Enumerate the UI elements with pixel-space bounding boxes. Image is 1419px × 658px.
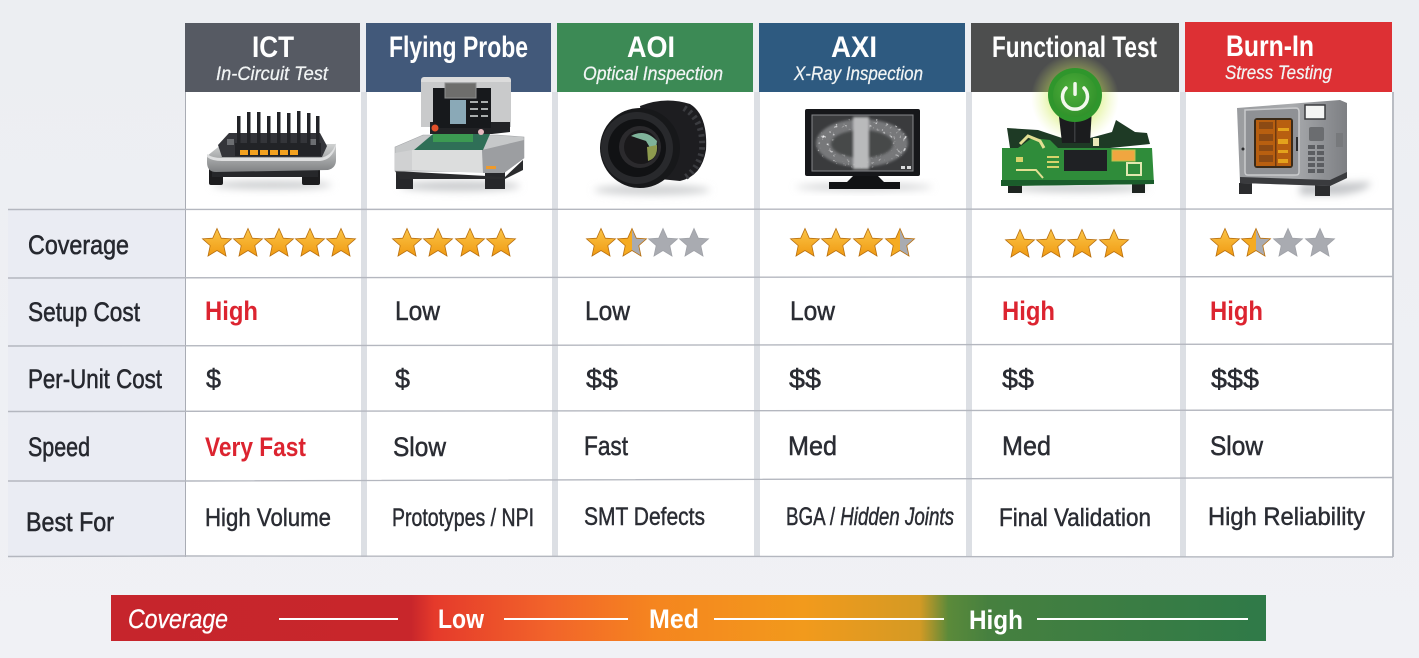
header: AOI xyxy=(557,23,753,92)
header: AXI: AXI xyxy=(831,31,877,64)
row: per-unit cost values: $ xyxy=(395,364,410,394)
row labels: Per-Unit Cost xyxy=(28,364,162,394)
row: setup cost values: High xyxy=(205,296,258,326)
icon: functional test board with power button xyxy=(1001,54,1154,193)
row: speed values: Slow xyxy=(393,432,446,462)
icon: ICT bed-of-nails fixture xyxy=(207,111,336,189)
header: AOI: AOI xyxy=(627,31,675,64)
row: setup cost values: High xyxy=(1002,296,1055,326)
row divider lines xyxy=(8,209,1393,557)
row: best for values: SMT Defects xyxy=(584,503,705,531)
header: AXI xyxy=(759,23,965,92)
row: speed values: Med xyxy=(1002,431,1051,461)
row labels: Coverage xyxy=(28,230,129,260)
stars: ICT five of five xyxy=(202,228,356,256)
header: Functional Test: Functional Test xyxy=(992,31,1157,64)
header: ICT: ICT xyxy=(252,31,294,64)
header: Burn-In xyxy=(1185,22,1392,92)
row: speed values: Slow xyxy=(1210,431,1263,461)
row labels xyxy=(26,230,162,537)
row: best for values xyxy=(205,503,1365,532)
row: speed values: Fast xyxy=(584,431,628,461)
row: setup cost values: Low xyxy=(395,296,440,326)
header: Burn-In: Burn-In xyxy=(1226,30,1314,63)
stars: Functional Test four xyxy=(1006,230,1128,257)
row: best for values: BGA / Hidden Joints xyxy=(786,503,954,531)
comparison table xyxy=(8,22,1394,557)
header: Flying Probe xyxy=(366,23,551,92)
header: AXI: X-Ray Inspection xyxy=(793,64,923,85)
row: per-unit cost values xyxy=(206,364,1259,394)
row: per-unit cost values: $$ xyxy=(586,364,618,394)
stars: AOI one and a half xyxy=(586,228,708,256)
stars: AXI three and a half xyxy=(790,228,914,256)
legend: coverage gradient bar: Coverage xyxy=(128,604,228,634)
row: per-unit cost values: $$ xyxy=(1002,364,1034,394)
row: speed values: Med xyxy=(788,431,837,461)
row: best for values: Final Validation xyxy=(999,504,1151,532)
icon: AOI camera lens xyxy=(594,100,710,195)
header: Burn-In: Stress Testing xyxy=(1225,63,1332,84)
row: best for values: High Volume xyxy=(205,504,331,532)
row: best for values: High Reliability xyxy=(1208,503,1365,531)
row: setup cost values: High xyxy=(1210,296,1263,326)
stars: Flying Probe four xyxy=(392,228,516,256)
panel: column bodies xyxy=(185,92,1394,557)
row labels: Best For xyxy=(26,507,114,537)
row: per-unit cost values: $$ xyxy=(789,364,821,394)
row: speed values xyxy=(205,431,1263,462)
header: ICT xyxy=(185,23,360,92)
icon: burn-in oven xyxy=(1237,100,1370,196)
icon: flying probe machine xyxy=(395,77,524,191)
icon: AXI x-ray monitor xyxy=(796,109,932,190)
legend: coverage gradient bar xyxy=(111,595,1266,641)
legend: coverage gradient bar: Med xyxy=(649,604,699,634)
row: coverage star ratings xyxy=(202,228,1334,257)
row: setup cost values: Low xyxy=(585,296,630,326)
header: Functional Test xyxy=(971,23,1179,92)
row: setup cost values xyxy=(205,296,1263,326)
row: per-unit cost values: $ xyxy=(206,364,221,394)
row: best for values: Prototypes / NPI xyxy=(392,504,534,532)
header: ICT: In-Circuit Test xyxy=(216,64,329,85)
row: setup cost values: Low xyxy=(790,296,835,326)
stars: Burn-In one and a half xyxy=(1210,228,1334,256)
row labels: Setup Cost xyxy=(28,297,140,327)
row: speed values: Very Fast xyxy=(205,432,306,462)
row: per-unit cost values: $$$ xyxy=(1211,364,1259,394)
header: Flying Probe: Flying Probe xyxy=(389,31,528,64)
row labels: Speed xyxy=(28,432,90,462)
legend: coverage gradient bar: High xyxy=(969,605,1023,635)
header: AOI: Optical Inspection xyxy=(583,64,723,85)
legend: coverage gradient bar: Low xyxy=(438,604,485,634)
